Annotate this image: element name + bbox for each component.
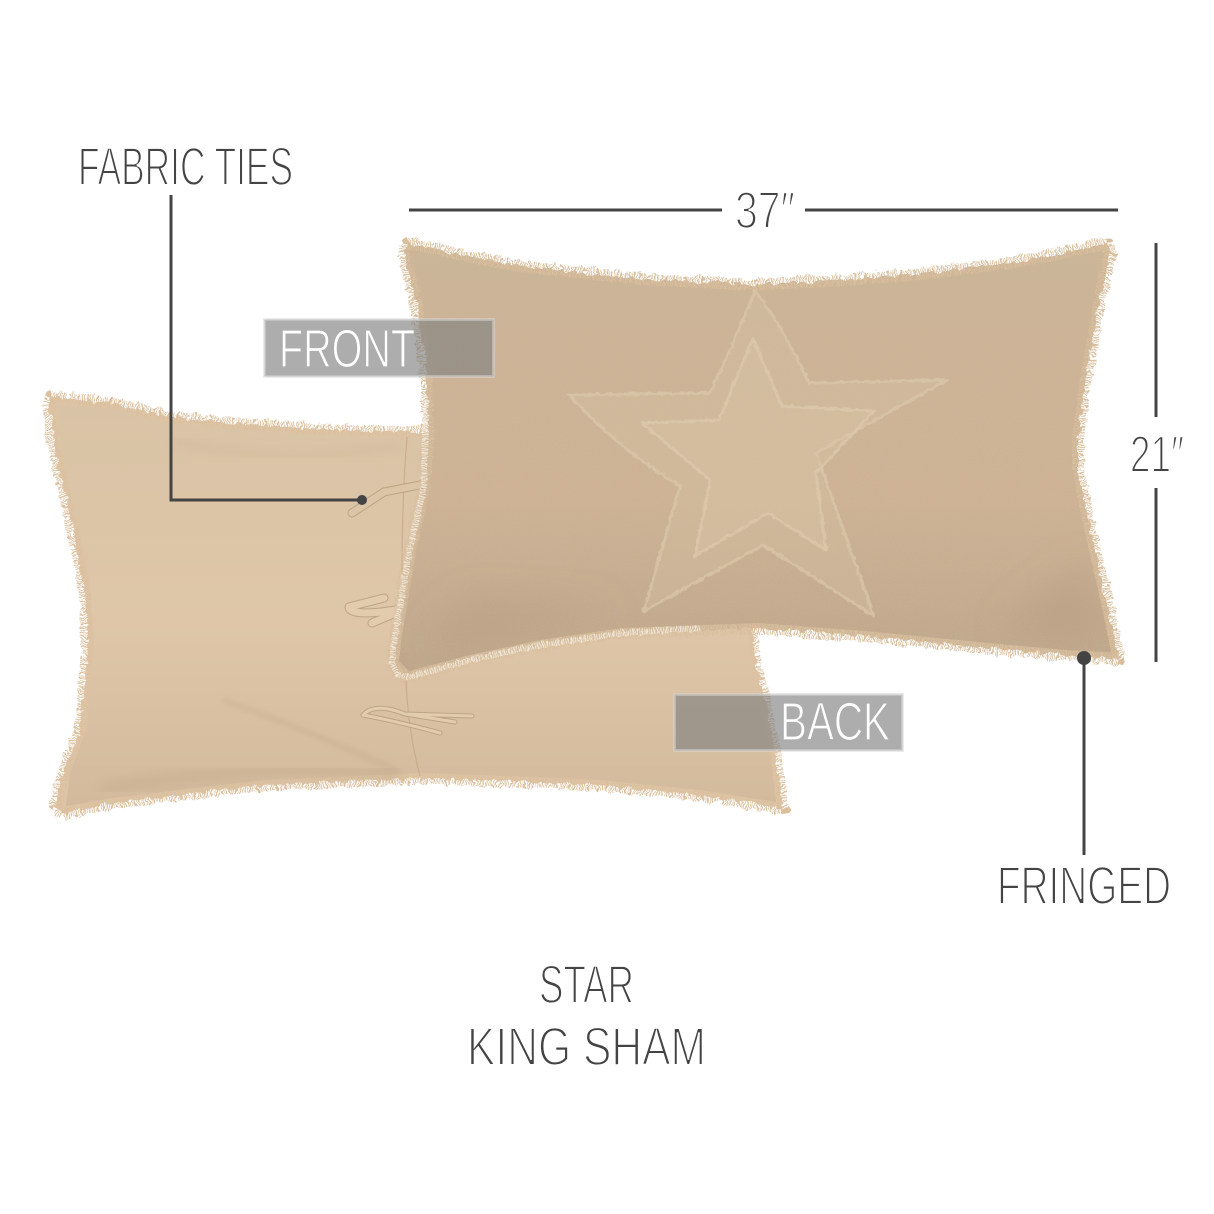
back pillow creases <box>100 440 400 790</box>
fabric ties label: FABRIC TIES <box>78 137 293 197</box>
width line <box>409 208 1118 212</box>
tie: upper <box>352 483 430 513</box>
callout: fabric ties <box>78 137 367 505</box>
callout: fringed <box>997 651 1171 916</box>
back tag box <box>674 694 902 750</box>
front pillow corner shading <box>1068 605 1072 614</box>
back pillow fringe <box>48 397 783 813</box>
fringed dot <box>1077 651 1091 665</box>
height line <box>1154 243 1158 662</box>
title line 2: KING SHAM <box>467 1017 706 1077</box>
front pillow <box>392 243 1119 677</box>
tie: middle <box>349 598 398 623</box>
fringed leader line <box>1082 660 1086 855</box>
fabric ties dot <box>357 495 367 505</box>
back placket seam <box>402 437 420 776</box>
front pillow body <box>399 250 1111 671</box>
back pillow <box>48 397 783 813</box>
height value: 21″ <box>1130 426 1184 484</box>
back pillow body <box>56 404 776 806</box>
star outer outline <box>569 291 947 616</box>
front pillow light fringe, lower-left <box>392 400 700 677</box>
title line 1: STAR <box>539 955 634 1015</box>
label: front <box>264 319 494 379</box>
title <box>467 955 706 1077</box>
star inner outline <box>642 338 874 556</box>
front pillow fringe <box>392 243 1119 677</box>
tie: lower <box>363 708 472 733</box>
front tag text: FRONT <box>279 319 415 379</box>
width value: 37″ <box>735 182 795 240</box>
back tag text: BACK <box>780 692 890 752</box>
fabric ties leader line <box>171 195 362 500</box>
front tag box <box>264 320 494 376</box>
label: back <box>674 692 902 752</box>
